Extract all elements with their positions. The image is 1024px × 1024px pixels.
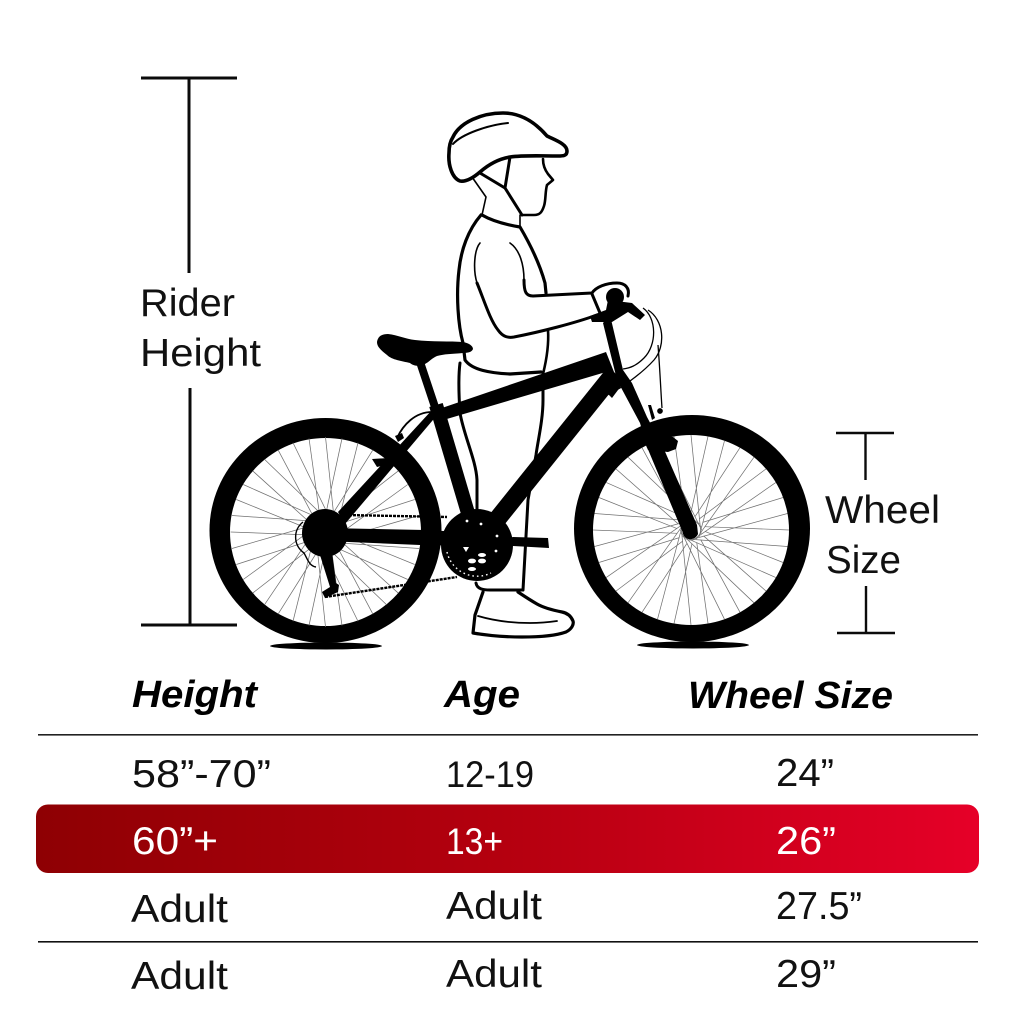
shoe [473, 592, 573, 637]
row divider [38, 941, 978, 943]
front wheel spokes [592, 435, 790, 625]
seat post [420, 362, 436, 410]
highlighted row: 26 inch: 26” [776, 820, 836, 863]
crankset and pedal [441, 509, 549, 581]
frame [325, 352, 624, 546]
row: 27.5 inch: Adult [131, 888, 228, 931]
wheel size bottom bracket [837, 586, 895, 633]
table header [132, 674, 893, 717]
rider height dimension marker [140, 78, 261, 625]
row: 29 inch: Adult [446, 953, 542, 996]
wheel size dimension marker [825, 433, 940, 633]
rear cassette and derailleur [296, 509, 348, 598]
wheel size label: Size [826, 539, 901, 582]
rider height label [140, 282, 261, 375]
rider figure [449, 113, 628, 637]
table header: Age [443, 674, 520, 716]
row: 24 inch: 24” [776, 752, 834, 795]
row: 27.5 inch: 27.5” [776, 885, 862, 928]
wheel size label [825, 489, 940, 582]
size table [36, 674, 979, 998]
highlighted row: 26 inch: 13+ [446, 821, 503, 862]
row: 29 inch: Adult [131, 955, 228, 998]
rider height bottom bracket [141, 388, 237, 625]
row: 29 inch: 29” [776, 953, 836, 996]
wheel size top bracket [836, 433, 894, 480]
bicycle [210, 288, 810, 650]
rider height top bracket [141, 78, 237, 273]
row: 27.5 inch [131, 885, 862, 931]
torso [458, 215, 548, 374]
fork and head tube [603, 315, 698, 539]
helmet [449, 113, 567, 181]
row: 24 inch: 58”-70” [132, 753, 271, 796]
arm and hand [475, 243, 628, 337]
rider height label: Rider [140, 282, 235, 325]
row: 24 inch: 12-19 [446, 754, 534, 795]
row: 24 inch [132, 752, 834, 796]
highlighted row: 26 inch [36, 804, 979, 873]
face and neck [472, 157, 553, 226]
handlebar and stem [590, 288, 645, 322]
rider height label: Height [140, 332, 261, 375]
row: 29 inch [131, 953, 836, 998]
saddle [377, 334, 473, 366]
header divider [38, 734, 978, 736]
brake cables [603, 308, 662, 413]
wheel size label: Wheel [825, 489, 940, 532]
ground shadows [270, 642, 749, 650]
table header: Wheel Size [688, 675, 893, 717]
table header: Height [132, 674, 258, 716]
row: 27.5 inch: Adult [446, 885, 542, 928]
rear wheel [210, 418, 442, 643]
legs [459, 363, 543, 590]
rear wheel spokes [229, 437, 422, 627]
front wheel [574, 415, 810, 642]
highlighted row: 26 inch: 60”+ [132, 820, 218, 863]
chainring cut-outs [447, 520, 498, 576]
chain [325, 515, 457, 597]
